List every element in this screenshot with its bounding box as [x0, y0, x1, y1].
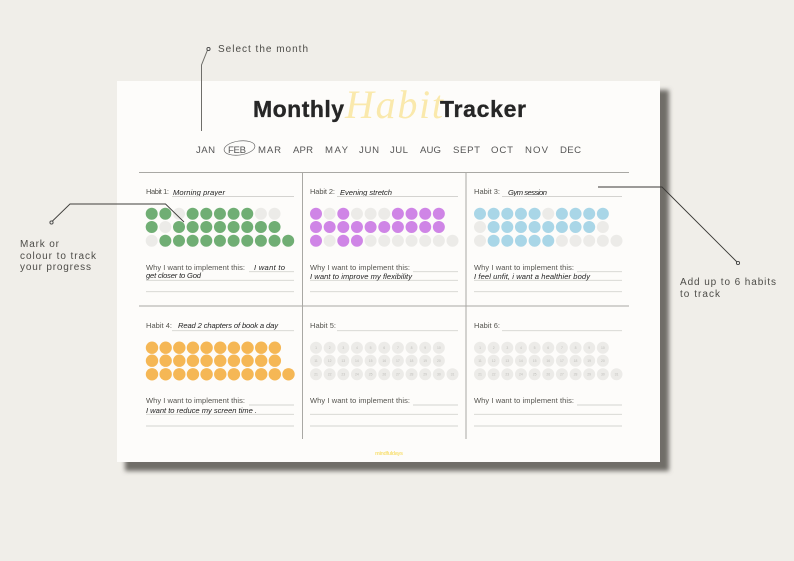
panel: habit 1: I want to: [254, 263, 285, 272]
month selector: JUL: [390, 145, 409, 156]
habit 6 dots: 21: [478, 373, 482, 377]
habit 5 dots: 29: [423, 373, 427, 377]
habit 5 dots: 6: [383, 346, 385, 350]
panel: habit 5: Why I want to implement this:: [310, 396, 410, 405]
paper shadow: [125, 90, 669, 471]
habit 6 dots: 10: [601, 346, 605, 350]
habit 5 dots: 9: [424, 346, 426, 350]
title: Habit: [344, 82, 444, 127]
panel: habit 4: [146, 321, 295, 426]
callout: add up to 6 habits: to track: [680, 289, 721, 300]
callout: select the month: Select the month: [218, 44, 308, 55]
habit 5 dots: 13: [341, 359, 345, 363]
habit 6 dots: 4: [520, 346, 522, 350]
panel: habit 1: [146, 187, 294, 292]
habit 6 dots: 14: [519, 359, 523, 363]
panel: habit 5: Habit 5:: [310, 321, 336, 330]
title: Tracker: [440, 96, 526, 122]
habit 5 dots: 1: [315, 346, 317, 350]
habit 5 dots: 31: [451, 373, 454, 377]
panel: habit 3: Why I want to implement this:: [474, 263, 574, 272]
habit 5 dots: 10: [437, 346, 441, 350]
habit 5 dots: 11: [314, 359, 318, 363]
panel: habit 4: Read 2 chapters of book a day: [178, 321, 279, 330]
habit 5 dots: 27: [396, 373, 400, 377]
habit 5 dots: [310, 342, 458, 380]
habit 6 dots: 6: [547, 346, 549, 350]
habit 6 dots: 5: [534, 346, 536, 350]
panel: habit 3: Habit 3:: [474, 187, 500, 196]
panel: habit 4: Why I want to implement this:: [146, 396, 245, 405]
month selector: MAR: [258, 145, 281, 156]
month selector: SEPT: [453, 145, 480, 156]
title: [253, 82, 526, 127]
habit 6 dots: 25: [533, 373, 537, 377]
panel: habit 4: Habit 4:: [146, 321, 172, 330]
paper sheet: [117, 81, 660, 462]
habit 6 dots: 1: [479, 346, 481, 350]
habit 6 dots: 2: [493, 346, 495, 350]
panel: habit 2: Evening stretch: [340, 188, 392, 197]
panel: habit 2: Why I want to implement this:: [310, 263, 410, 272]
habit 1 dots: [146, 208, 294, 247]
habit 6 dots: 11: [478, 359, 482, 363]
habit 5 dots: 14: [355, 359, 359, 363]
habit 6 dots: 24: [519, 373, 523, 377]
grid lines: [139, 172, 629, 439]
panel: habit 3: I feel unfit, i want a healthier body: [474, 272, 591, 281]
callout: select the month: [202, 44, 308, 131]
panel: habit 6: [474, 321, 622, 426]
habit 5 dots: 2: [329, 346, 331, 350]
habit 5 dots: 3: [342, 346, 344, 350]
month selector: OCT: [491, 145, 513, 156]
panel: habit 5: [310, 321, 458, 426]
month selector: JAN: [196, 145, 215, 156]
habit 6 dots: 16: [546, 359, 550, 363]
panel: habit 6: Why I want to implement this:: [474, 396, 574, 405]
habit 5 dots: 20: [437, 359, 441, 363]
habit 6 dots: 27: [560, 373, 564, 377]
habit 6 dots: 12: [492, 359, 496, 363]
habit 5 dots: 12: [328, 359, 332, 363]
callout: mark or colour: [20, 204, 184, 273]
month selector: DEC: [560, 145, 581, 156]
callout: mark or colour: colour to track: [20, 251, 97, 262]
habit 2 dots: [310, 208, 458, 247]
habit 6 dots: 23: [505, 373, 509, 377]
habit 6 dots: 9: [588, 346, 590, 350]
callout: add up to 6 habits: Add up to 6 habits: [680, 277, 776, 288]
panel: habit 3: Gym session: [508, 188, 547, 197]
habit 6 dots: 3: [506, 346, 508, 350]
habit 6 dots: 29: [587, 373, 591, 377]
habit 6 dots: 18: [574, 359, 578, 363]
callout: mark or colour: your progress: [20, 262, 91, 273]
callout: add up to 6 habits: [598, 187, 776, 300]
habit 5 dots: 16: [382, 359, 386, 363]
habit 6 dots: 7: [561, 346, 563, 350]
habit 5 dots: 19: [423, 359, 427, 363]
month selector: AUG: [420, 145, 441, 156]
habit 4 dots: [146, 342, 295, 380]
habit 6 dots: 13: [505, 359, 509, 363]
habit 5 dots: 23: [341, 373, 345, 377]
habit 5 dots: 15: [369, 359, 373, 363]
footer brand: mindfuldays: [375, 451, 403, 457]
habit 5 dots: 4: [356, 346, 358, 350]
habit 5 dots: 18: [410, 359, 414, 363]
month selector: APR: [293, 145, 313, 156]
habit 5 dots: 21: [314, 373, 318, 377]
panel: habit 6: Habit 6:: [474, 321, 500, 330]
habit 6 dots: 22: [492, 373, 496, 377]
habit 6 dots: 15: [533, 359, 537, 363]
panel: habit 1: Why I want to implement this:: [146, 263, 245, 272]
month selector: NOV: [525, 145, 549, 156]
habit 6 dots: 17: [560, 359, 564, 363]
panel: habit 1: Habit 1:: [146, 187, 169, 196]
title: Monthly: [253, 96, 344, 122]
month selector: MAY: [325, 145, 349, 156]
callout: mark or colour: Mark or: [20, 239, 60, 250]
month selector: [196, 139, 581, 157]
habit 5 dots: 24: [355, 373, 359, 377]
habit 5 dots: 28: [410, 373, 414, 377]
habit 5 dots: 17: [396, 359, 400, 363]
panel: habit 4: I want to reduce my screen time .: [146, 406, 257, 415]
panel: habit 3: [474, 187, 622, 292]
habit 6 dots: 8: [575, 346, 577, 350]
panel: habit 2: I want to improve my flexibility: [310, 272, 413, 281]
habit 5 dots: 8: [411, 346, 413, 350]
habit 6 dots: 26: [546, 373, 550, 377]
habit 5 dots: 5: [370, 346, 372, 350]
habit 5 dots: 26: [382, 373, 386, 377]
habit 5 dots: 7: [397, 346, 399, 350]
habit 5 dots: 30: [437, 373, 441, 377]
panel: habit 1: Morning prayer: [173, 188, 225, 197]
habit 6 dots: 20: [601, 359, 605, 363]
month selector: FEB: [228, 145, 246, 156]
habit 6 dots: 30: [601, 373, 605, 377]
panel: habit 2: Habit 2:: [310, 187, 335, 196]
habit 5 dots: 25: [369, 373, 373, 377]
habit 6 dots: 31: [615, 373, 618, 377]
habit 3 dots: [474, 208, 622, 247]
month selector: JUN: [359, 145, 379, 156]
habit 6 dots: 28: [574, 373, 578, 377]
panel: habit 2: [310, 187, 458, 292]
habit 6 dots: 19: [587, 359, 591, 363]
habit 6 dots: [474, 342, 622, 380]
panel: habit 1: get closer to God: [146, 271, 202, 280]
habit 5 dots: 22: [328, 373, 332, 377]
